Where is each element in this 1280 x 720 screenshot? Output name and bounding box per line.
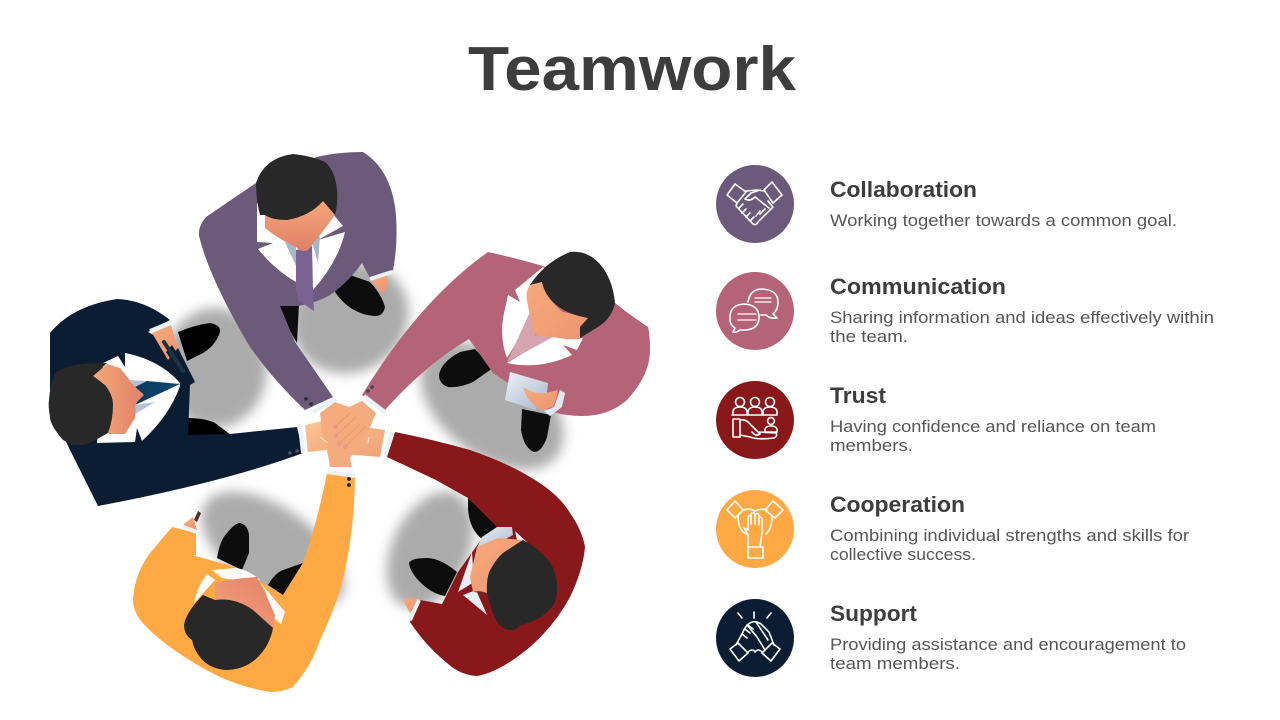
floor shadows (163, 241, 587, 631)
text: Support description (830, 635, 1186, 673)
item: Support (716, 599, 1186, 677)
icon: clasped hands (716, 599, 794, 677)
text: Support description: Providing assistance and encouragement to (830, 635, 1186, 654)
text: Cooperation description (830, 526, 1189, 564)
text: Communication description: the team. (830, 327, 908, 346)
text: Support description: team members. (830, 654, 960, 673)
person: orange suit (133, 472, 355, 692)
person: rose suit (362, 252, 650, 452)
person: red suit (385, 432, 585, 676)
joined hands (305, 401, 385, 467)
heading: Trust: Trust (830, 383, 887, 408)
text: Trust description: members. (830, 436, 913, 455)
item: Communication (716, 272, 1214, 350)
item: Cooperation (716, 490, 1189, 568)
person: purple suit (199, 152, 397, 412)
text: Cooperation description: Combining individual strengths and skills for (830, 526, 1189, 545)
person: navy suit (49, 299, 303, 506)
heading: Collaboration: Collaboration (830, 177, 977, 202)
text: Communication description (830, 308, 1214, 346)
illustration: five colleagues joining hands (49, 152, 650, 692)
icon: hand holding people (716, 381, 794, 459)
heading: Cooperation: Cooperation (830, 492, 965, 517)
icon: handshake (716, 165, 794, 243)
title: Teamwork (468, 35, 797, 104)
text: Trust description (830, 417, 1156, 455)
heading: Communication: Communication (830, 274, 1006, 299)
item: Trust (716, 381, 1156, 459)
icon: stacked hands (716, 490, 794, 568)
text: Trust description: Having confidence and reliance on team (830, 417, 1156, 436)
text: Collaboration description: Working together towards a common goal. (830, 211, 1177, 230)
text: Cooperation description: collective success. (830, 545, 976, 564)
text: Communication description: Sharing information and ideas effectively within (830, 308, 1214, 327)
heading: Support: Support (830, 601, 918, 626)
icon: speech bubbles (716, 272, 794, 350)
item: Collaboration (716, 165, 1177, 243)
